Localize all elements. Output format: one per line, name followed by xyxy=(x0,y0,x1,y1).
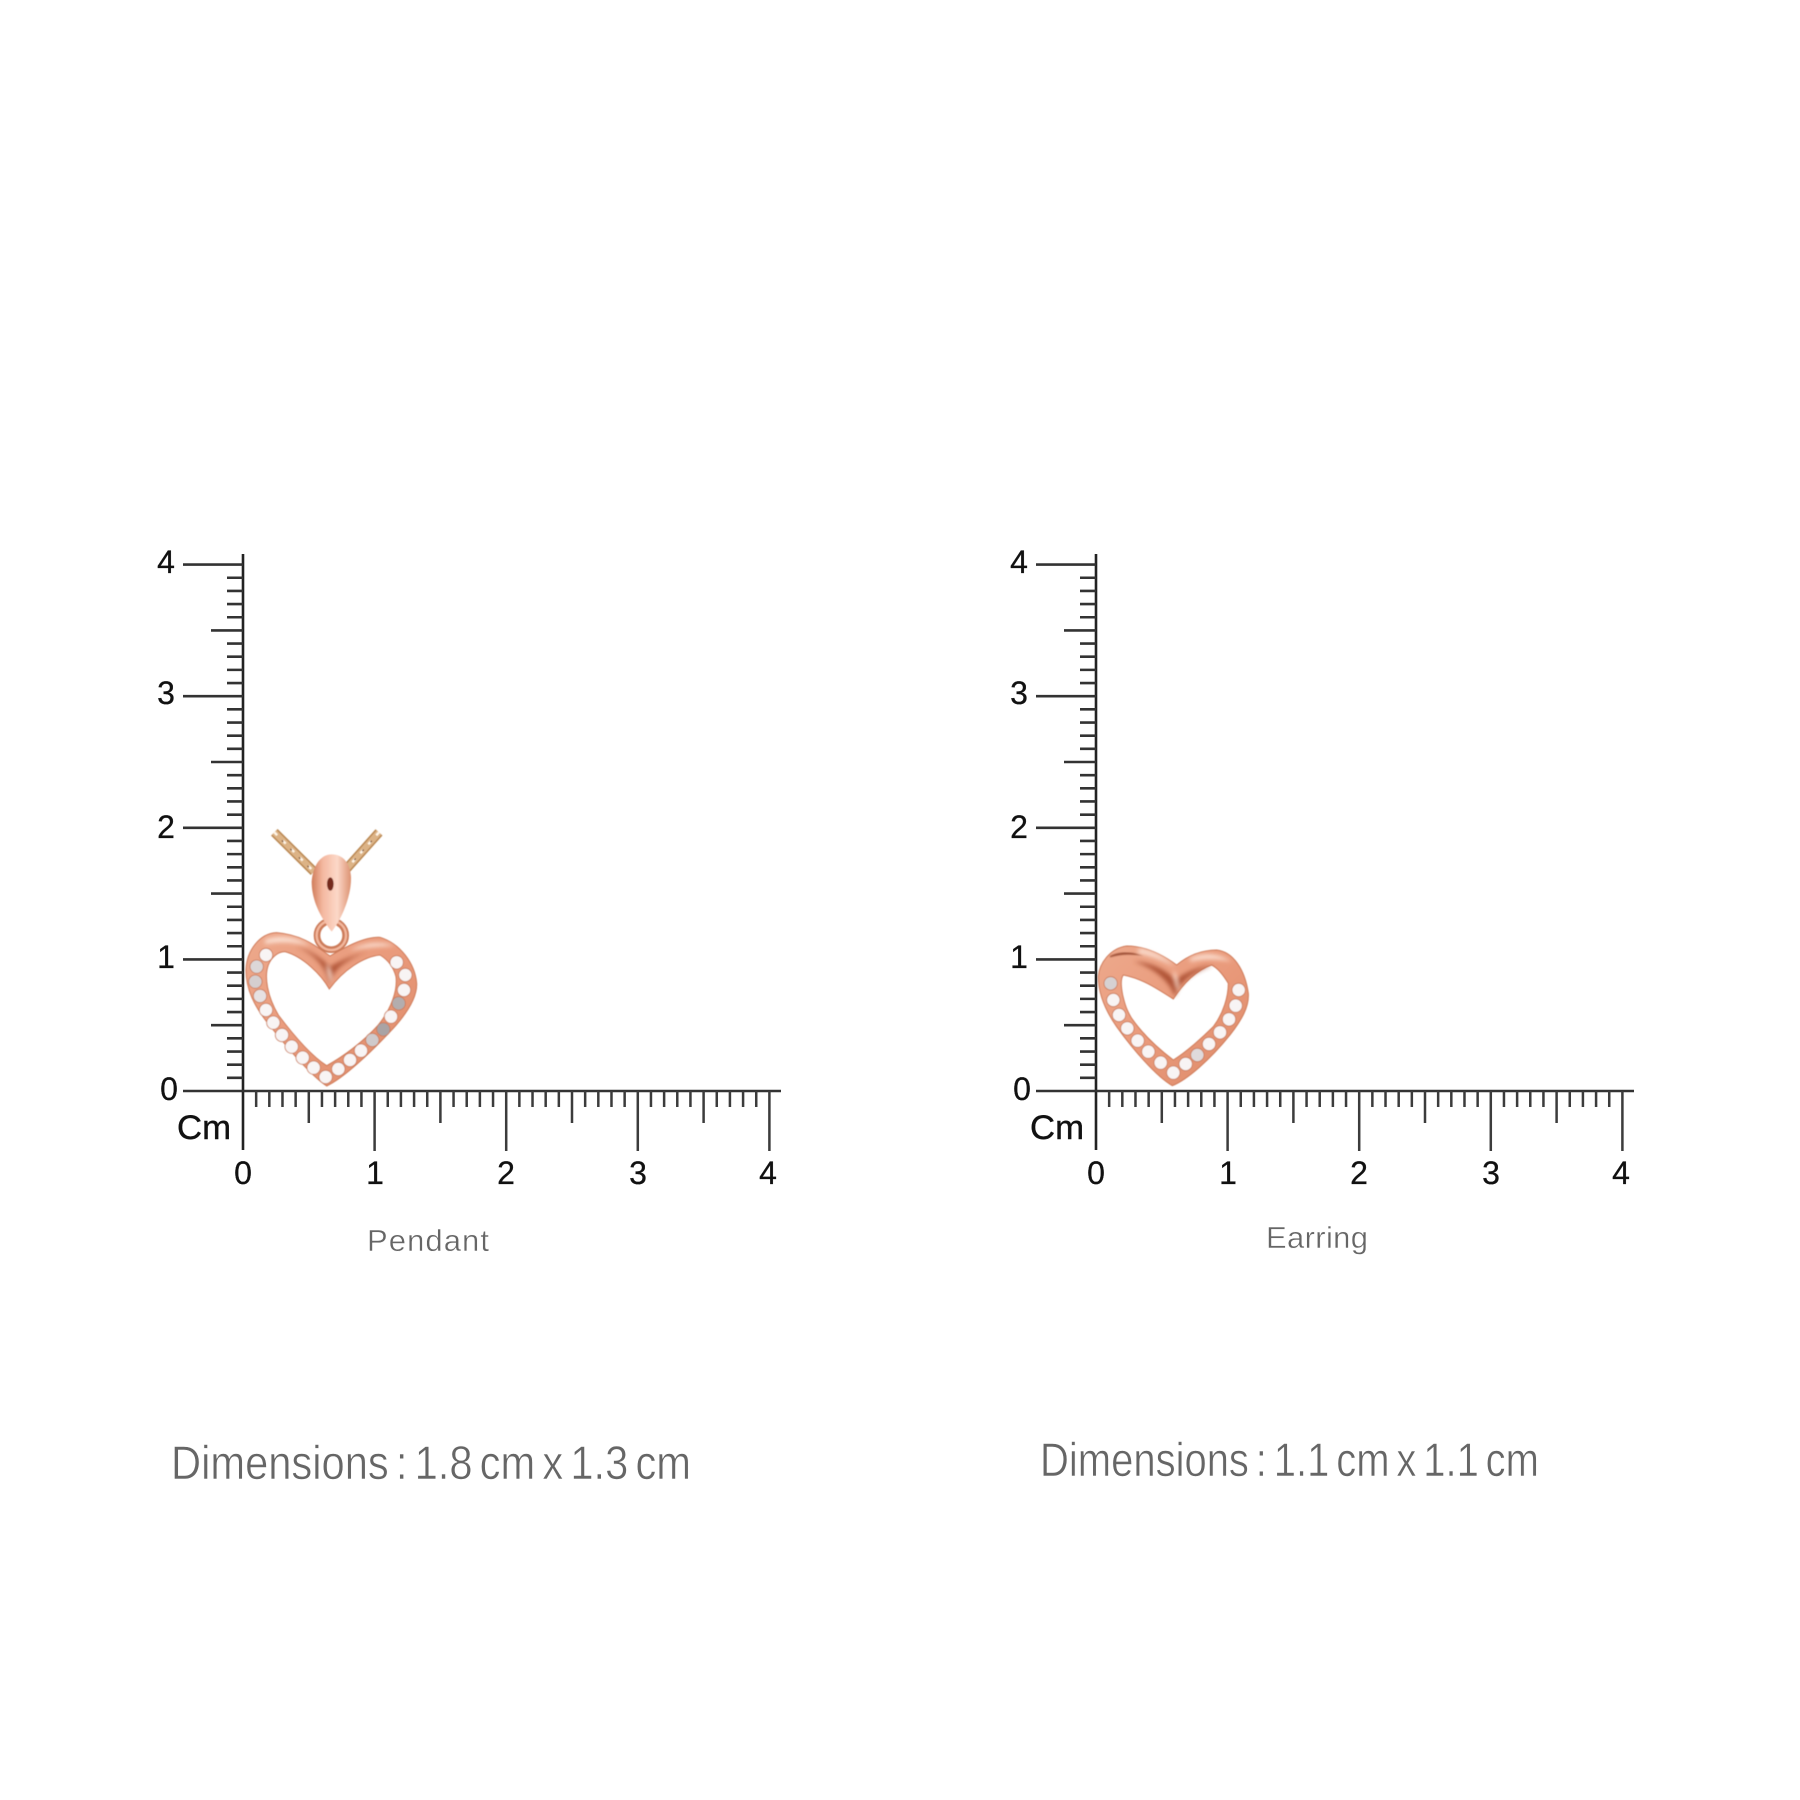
unit label: Cm xyxy=(177,1109,231,1147)
illustration: pendant with chain xyxy=(246,832,417,1086)
horizontal ruler ticks xyxy=(256,1091,769,1151)
horizontal scale numbers: 4 xyxy=(1612,1155,1630,1191)
bail reflection xyxy=(327,877,334,891)
vertical axis xyxy=(242,554,244,1150)
vertical scale numbers: 4 xyxy=(157,544,175,580)
horizontal scale numbers: 0 xyxy=(1087,1155,1105,1191)
metal highlights xyxy=(265,937,395,983)
stones xyxy=(1104,977,1245,1079)
vertical axis xyxy=(1095,554,1097,1150)
heart body xyxy=(246,933,417,1086)
vertical scale numbers: 2 xyxy=(157,809,175,845)
horizontal scale numbers: 1 xyxy=(1219,1155,1237,1191)
horizontal scale numbers: 0 xyxy=(234,1155,252,1191)
horizontal scale numbers: 2 xyxy=(1350,1155,1368,1191)
horizontal axis xyxy=(243,1090,781,1092)
metal highlights xyxy=(1138,948,1232,992)
horizontal scale numbers xyxy=(234,1155,777,1191)
horizontal scale numbers: 3 xyxy=(629,1155,647,1191)
vertical scale numbers xyxy=(157,544,178,1107)
vertical scale numbers: 0 xyxy=(160,1071,178,1107)
heart body xyxy=(1098,946,1248,1086)
vertical scale numbers xyxy=(1010,544,1031,1107)
ring highlight xyxy=(317,921,346,950)
vertical scale numbers: 1 xyxy=(157,939,175,975)
vertical ruler ticks xyxy=(183,565,243,1091)
ring xyxy=(317,921,346,950)
stones xyxy=(249,948,412,1084)
panel: earring ruler xyxy=(1010,544,1634,1191)
panel: pendant ruler xyxy=(157,544,781,1191)
vertical scale numbers: 0 xyxy=(1013,1071,1031,1107)
caption: pendant: Pendant xyxy=(367,1223,489,1258)
vertical scale numbers: 1 xyxy=(1010,939,1028,975)
earring dimensions text: Dimensions : 1.1 cm x 1.1 cm xyxy=(1040,1433,1539,1486)
horizontal scale numbers: 2 xyxy=(497,1155,515,1191)
horizontal scale numbers: 3 xyxy=(1482,1155,1500,1191)
vertical scale numbers: 3 xyxy=(1010,675,1028,711)
vertical scale numbers: 2 xyxy=(1010,809,1028,845)
unit label: Cm xyxy=(1030,1109,1084,1147)
chain xyxy=(274,832,379,872)
horizontal scale numbers: 4 xyxy=(759,1155,777,1191)
metal shading xyxy=(297,947,367,985)
horizontal axis xyxy=(1096,1090,1634,1092)
vertical scale numbers: 3 xyxy=(157,675,175,711)
metal shading xyxy=(1133,962,1213,997)
illustration: earring xyxy=(1098,946,1248,1086)
dark reflection xyxy=(1110,952,1143,957)
pendant dimensions text: Dimensions : 1.8 cm x 1.3 cm xyxy=(171,1436,691,1489)
horizontal scale numbers xyxy=(1087,1155,1630,1191)
bail xyxy=(312,854,351,932)
caption: earring: Earring xyxy=(1266,1220,1368,1255)
vertical ruler ticks xyxy=(1036,565,1096,1091)
vertical scale numbers: 4 xyxy=(1010,544,1028,580)
horizontal ruler ticks xyxy=(1109,1091,1622,1151)
horizontal scale numbers: 1 xyxy=(366,1155,384,1191)
